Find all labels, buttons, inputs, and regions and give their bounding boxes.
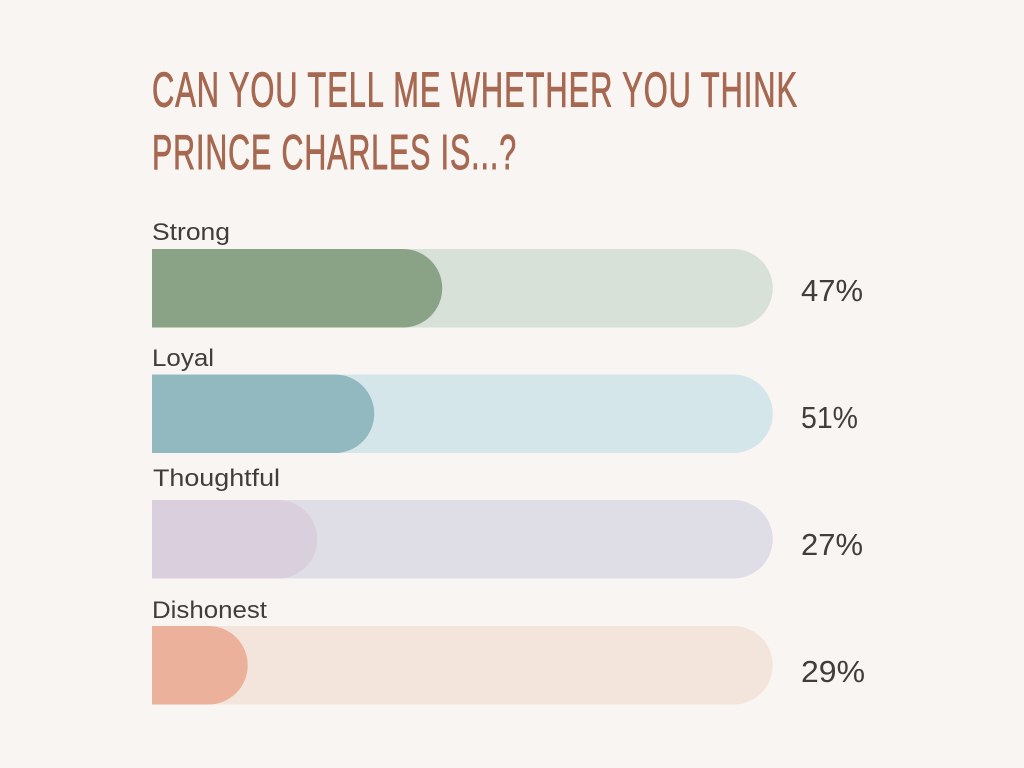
- bar track: Dishonest: [152, 626, 773, 704]
- value: 27%: 27%: [801, 527, 863, 562]
- title: PRINCE CHARLES IS...?: [152, 126, 517, 180]
- value: 51%: 51%: [801, 400, 858, 435]
- bar fill: Thoughtful: [152, 500, 317, 578]
- row: Dishonest: [152, 597, 865, 704]
- row: Loyal: [152, 345, 858, 453]
- bar fill: Loyal: [152, 374, 374, 453]
- label: Dishonest: Dishonest: [152, 597, 267, 624]
- value: 29%: 29%: [801, 654, 865, 689]
- bar fill: Dishonest: [152, 626, 248, 704]
- row: Strong: [152, 219, 863, 328]
- value: 47%: 47%: [801, 273, 863, 308]
- label: Strong: Strong: [152, 219, 230, 246]
- bar track: Strong: [152, 249, 773, 328]
- title: [152, 64, 798, 180]
- label: Loyal: Loyal: [152, 345, 214, 372]
- bar track: Thoughtful: [152, 500, 773, 578]
- row: Thoughtful: [152, 465, 863, 578]
- bar track: Loyal: [152, 374, 773, 453]
- bar fill: Strong: [152, 249, 442, 328]
- label: Thoughtful: Thoughtful: [153, 465, 280, 492]
